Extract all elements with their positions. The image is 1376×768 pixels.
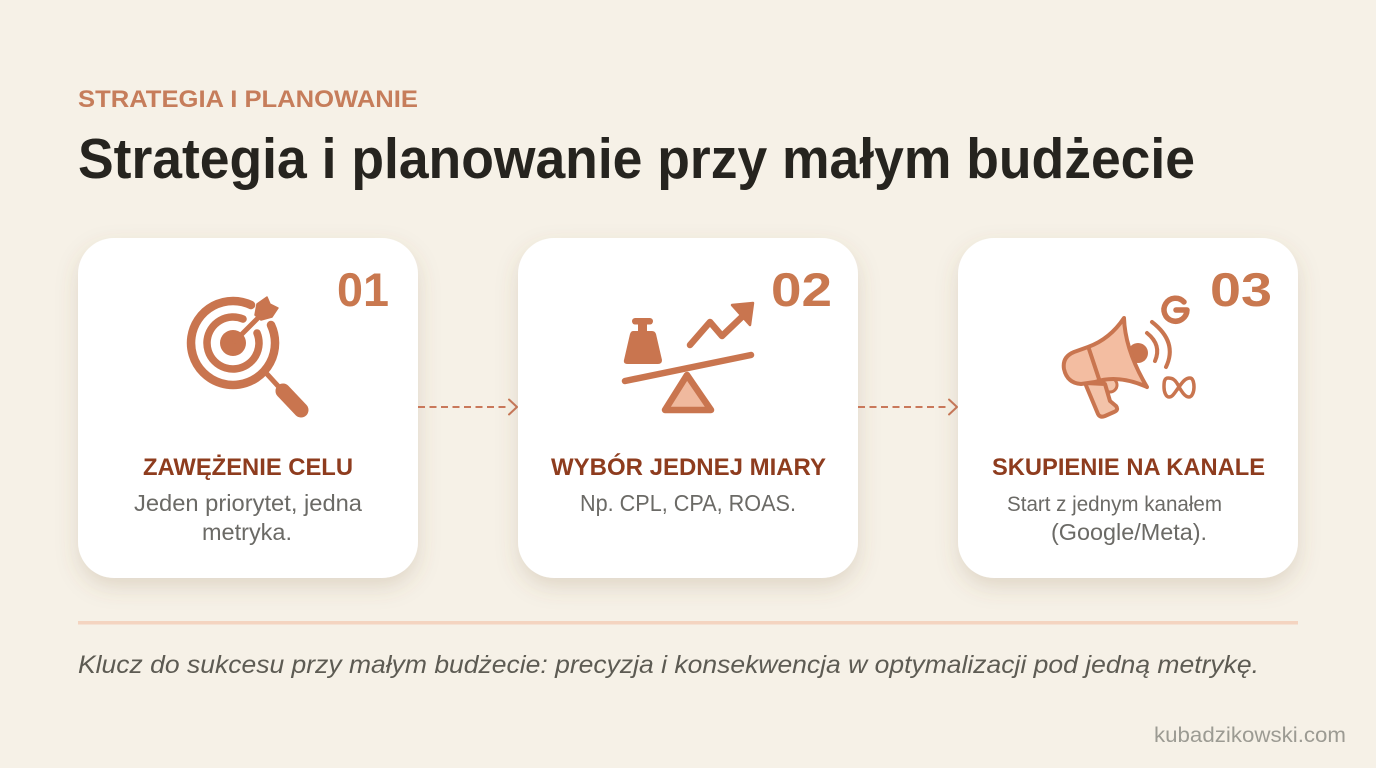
footer website: kubadzikowski.com	[1154, 723, 1346, 747]
card 3 heading: SKUPIENIE NA KANALE	[992, 454, 1265, 481]
title: Strategia i planowanie przy małym budżecie	[78, 127, 1195, 191]
card 2 heading: WYBÓR JEDNEJ MIARY	[551, 453, 826, 481]
card 1 number: 01	[337, 263, 389, 316]
arrow: card 1 to card 2	[418, 400, 517, 414]
card 1 description: metryka.	[202, 519, 292, 545]
panel: card 3	[958, 238, 1298, 578]
card 3 description: Start z jednym kanałem	[1007, 493, 1222, 516]
card 1 description	[134, 490, 362, 545]
card 3 description	[1007, 493, 1222, 545]
icon: target with magnifier	[191, 297, 301, 410]
card 2 description: Np. CPL, CPA, ROAS.	[580, 490, 796, 516]
closing statement: Klucz do sukcesu przy małym budżecie: precyzja i konsekwencja w optymalizacji pod jedną metrykę.	[78, 651, 1259, 679]
card 2 number: 02	[771, 263, 832, 316]
eyebrow label: STRATEGIA I PLANOWANIE	[78, 86, 418, 113]
icon: scale with weight and growth arrow	[624, 303, 753, 410]
card 1 description: Jeden priorytet, jedna	[134, 490, 362, 516]
card 3 description: (Google/Meta).	[1051, 519, 1207, 545]
panel: card 2	[518, 238, 858, 578]
card 1 background	[78, 238, 418, 578]
card 2 background	[518, 238, 858, 578]
card 1 heading: ZAWĘŻENIE CELU	[143, 454, 353, 481]
panel: card 1	[78, 238, 418, 578]
card 3 number: 03	[1210, 263, 1272, 316]
icon: megaphone with Google and Meta marks	[1064, 298, 1194, 417]
card 3 background	[958, 238, 1298, 578]
arrow: card 2 to card 3	[858, 400, 957, 414]
